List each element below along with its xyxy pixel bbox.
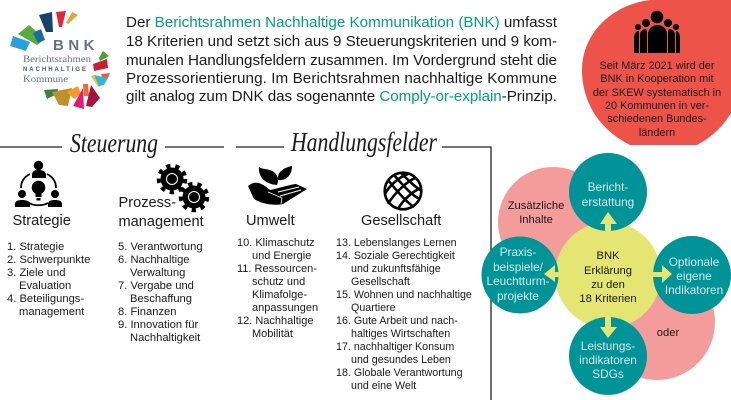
icon: globe — [385, 173, 422, 209]
circle: Leistungsindikatoren SDGs: SDGs — [592, 367, 624, 381]
list: Prozessmanagement: 9. Innovation für — [118, 319, 199, 331]
heading: Steuerung: Steuerung — [70, 128, 158, 158]
circle: Leistungsindikatoren SDGs: indikatoren — [579, 353, 637, 367]
heading: Prozessmanagement: Prozess- — [118, 195, 176, 211]
circle: Praxisbeispiele: Leuchtturm- — [487, 274, 550, 288]
list: Gesellschaft: Quartiere — [351, 302, 396, 314]
list: Strategie: 1. Strategie — [7, 241, 64, 253]
list: Prozessmanagement: 6. Nachhaltige — [118, 254, 190, 266]
circle: center: Erklärung — [584, 265, 632, 277]
list: Strategie: 4. Beteiligungs- — [7, 293, 84, 305]
circle: Optionale eigene Indikatoren — [653, 236, 731, 314]
circle: Leistungsindikatoren SDGs — [569, 317, 647, 395]
list: Gesellschaft: und zukunftsfähige — [351, 263, 441, 275]
circle: Optionale eigene Indikatoren: Optionale — [669, 255, 720, 269]
heading: Prozessmanagement — [118, 195, 204, 230]
icon: gears — [159, 166, 207, 210]
circle: oder: oder — [657, 327, 679, 339]
circle: Zusätzliche Inhalte: Inhalte — [519, 214, 553, 226]
list: Gesellschaft: 17. nachhaltiger Konsum — [336, 341, 454, 353]
logo: BNK Berichtsrahmen: Berichtsrahmen — [23, 54, 91, 64]
circle: Praxisbeispiele: Praxis- — [500, 245, 536, 259]
list: Prozessmanagement: 7. Vergabe und — [118, 280, 194, 292]
logo: BNK Berichtsrahmen: Kommune — [23, 74, 68, 84]
list: Umwelt: Klimafolge- — [252, 289, 307, 301]
heading: Umwelt: Umwelt — [246, 213, 295, 229]
circle: Zusätzliche Inhalte — [498, 167, 608, 277]
intro text block: Der Berichtsrahmen Nachhaltige Kommunikation (BNK) umfasst — [126, 14, 558, 31]
intro text block: munalen Handlungsfeldern zusammen. Im Vordergrund steht die — [126, 52, 557, 69]
intro text block: gilt analog zum DNK das sogenannte Comply-or-explain-Prinzip. — [126, 88, 557, 105]
list: Prozessmanagement: Nachhaltigkeit — [130, 332, 201, 344]
circle: Praxisbeispiele — [482, 236, 560, 314]
list: Gesellschaft: 13. Lebenslanges Lernen — [336, 237, 457, 249]
list: Gesellschaft: 14. Soziale Gerechtigkeit — [336, 250, 455, 262]
circle: Praxisbeispiele: projekte — [497, 289, 539, 303]
callout: red drop with people icon — [582, 0, 731, 145]
icon: group of people — [634, 11, 680, 53]
logo: BNK Berichtsrahmen: BNK — [53, 37, 99, 54]
list: Umwelt: schutz und — [252, 276, 305, 288]
diagram: BNK Erklärung — [482, 153, 731, 395]
heading: Prozessmanagement: management — [118, 214, 204, 230]
circle: center: BNK — [596, 250, 620, 262]
list: Strategie: Evaluation — [19, 280, 71, 292]
list: Prozessmanagement: 8. Finanzen — [118, 306, 176, 318]
list: Prozessmanagement: 5. Verantwortung — [118, 241, 203, 253]
callout text: BNK in Kooperation mit — [600, 73, 714, 85]
callout text: Seit März 2021 wird der — [599, 60, 715, 72]
intro text block: 18 Kriterien und setzt sich aus 9 Steuerungskriterien und 9 kom- — [126, 33, 557, 50]
circle: Berichterstattung: Bericht- — [588, 180, 628, 194]
list: Umwelt: 10. Klimaschutz — [237, 237, 315, 249]
list: Strategie: 3. Ziele und — [7, 267, 65, 279]
list: Gesellschaft: Gesellschaft — [351, 276, 410, 288]
circle: oder — [599, 264, 715, 380]
circle: center: zu den — [591, 279, 625, 291]
circle: Leistungsindikatoren SDGs: Leistungs- — [581, 339, 635, 353]
list: Umwelt — [237, 237, 318, 340]
list: Umwelt: Mobilität — [252, 328, 293, 340]
circle: Optionale eigene Indikatoren: eigene — [676, 269, 712, 283]
logo: BNK Berichtsrahmen: NACHHALTIGE — [23, 67, 86, 73]
list: Umwelt: und Energie — [252, 250, 311, 262]
heading rule lines — [0, 147, 491, 400]
intro text block: Prozessorientierung. Im Berichtsrahmen nachhaltige Kommune — [126, 70, 557, 87]
heading: Gesellschaft: Gesellschaft — [361, 213, 441, 229]
heading: Handlungsfelder: Handlungsfelder — [290, 127, 437, 157]
list: Gesellschaft: 15. Wohnen und nachhaltige — [336, 289, 472, 301]
list: Prozessmanagement: Beschaffung — [130, 293, 192, 305]
callout text: schiedenen Bundes- — [607, 113, 707, 125]
list: Umwelt: anpassungen — [252, 302, 318, 314]
heading: Strategie: Strategie — [12, 213, 71, 229]
circle: center: 18 Kriterien — [579, 293, 637, 305]
callout text: 20 Kommunen in ver- — [605, 100, 709, 112]
icon: strategy team with light bulb — [15, 161, 62, 207]
list: Gesellschaft: und eine Welt — [351, 380, 416, 392]
list: Strategie: management — [19, 306, 85, 318]
list: Strategie — [7, 241, 90, 318]
list: Strategie: 2. Schwerpunkte — [7, 254, 90, 266]
list: Gesellschaft: haltiges Wirtschaften — [351, 328, 450, 340]
list: Umwelt: 12. Nachhaltige — [237, 315, 313, 327]
callout text: ländern — [639, 127, 675, 139]
circle: center — [555, 222, 661, 328]
list: Gesellschaft: 16. Gute Arbeit und nach- — [336, 315, 458, 327]
list: Prozessmanagement — [118, 241, 203, 344]
callout text: der SKEW systematisch in — [593, 87, 721, 99]
icon: hand with plant — [248, 166, 307, 205]
circle: Berichterstattung: erstattung — [582, 195, 634, 209]
circle: Optionale eigene Indikatoren: Indikatoren — [665, 283, 723, 297]
list: Gesellschaft: und gesundes Leben — [351, 354, 451, 366]
intro text block — [126, 14, 558, 105]
circle: Berichterstattung — [569, 153, 647, 232]
callout text — [593, 60, 721, 139]
list: Gesellschaft — [336, 237, 472, 392]
list: Umwelt: 11. Ressourcen- — [237, 263, 317, 275]
logo: BNK Berichtsrahmen — [10, 11, 110, 109]
list: Gesellschaft: 18. Globale Verantwortung — [336, 367, 463, 379]
list: Prozessmanagement: Verwaltung — [130, 267, 185, 279]
circle: Zusätzliche Inhalte: Zusätzliche — [508, 200, 564, 212]
circle: Praxisbeispiele: beispiele/ — [493, 260, 544, 274]
